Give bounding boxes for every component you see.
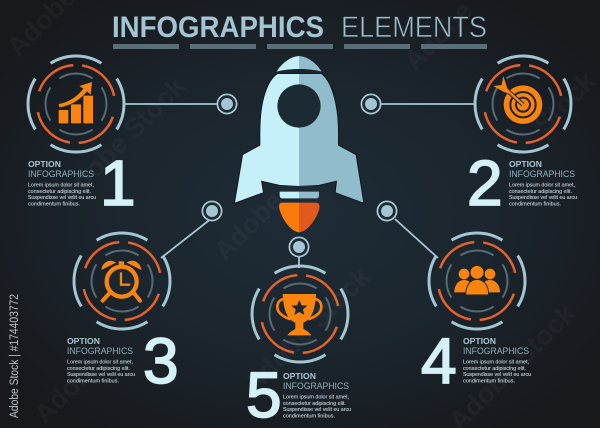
rocket nose — [277, 56, 322, 72]
text block 3 — [67, 336, 135, 384]
text block 1: OPTION — [28, 159, 61, 169]
text block 2 — [509, 159, 577, 207]
title — [112, 11, 487, 44]
text: Stock — [528, 65, 600, 139]
text: Adobe Stock — [238, 261, 377, 399]
icon: target with arrow — [493, 76, 542, 124]
vertical stock credit: Adobe Stock | #174403772 — [9, 294, 21, 418]
title underline bars — [113, 44, 487, 49]
text block 5: condimentum finibus. — [283, 413, 335, 419]
connector lines — [125, 104, 474, 268]
title: ELEMENTS — [341, 11, 487, 44]
text block 4: OPTION — [463, 336, 496, 346]
text block 5: Lorem ipsum dolor sit amet, — [283, 394, 349, 400]
text: Adobe Stock — [53, 71, 192, 209]
text block 2: Lorem ipsum dolor sit amet, — [509, 182, 575, 188]
text: Adobe — [208, 186, 289, 266]
text block 2: consectetur adipiscing elit. — [509, 189, 572, 195]
text block 4: condimentum finibus. — [463, 378, 515, 384]
icon: trophy — [277, 294, 321, 335]
text block 3: Suspendisse vel velit eu arcu — [67, 372, 135, 378]
ring: option 5 — [250, 264, 350, 364]
rocket body right half — [299, 74, 363, 203]
ring: option 4 — [427, 231, 527, 331]
text block 3: consectetur adipiscing elit. — [67, 366, 130, 372]
text block 1: consectetur adipiscing elit. — [28, 189, 91, 195]
text: Adobe — [28, 349, 109, 428]
connector nodes — [202, 94, 397, 257]
text block 3: Lorem ipsum dolor sit amet, — [67, 360, 133, 366]
ring: option 1 — [26, 54, 126, 154]
icon: alarm clock — [101, 261, 141, 301]
text block 5: OPTION — [283, 371, 316, 381]
text block 3: INFOGRAPHICS — [67, 346, 133, 356]
text block 5 — [283, 371, 351, 419]
text block 5: Suspendisse vel velit eu arcu — [283, 407, 351, 413]
number 3: 3 — [143, 325, 179, 397]
text block 4: Lorem ipsum dolor sit amet, — [463, 360, 529, 366]
text block 1: Lorem ipsum dolor sit amet, — [28, 182, 94, 188]
rocket nozzle — [280, 192, 319, 198]
text block 3: OPTION — [67, 336, 100, 346]
number 4: 4 — [421, 325, 457, 397]
icon: growth chart — [59, 82, 93, 123]
text block 2: Suspendisse vel velit eu arcu — [509, 195, 577, 201]
rocket flame — [279, 203, 320, 232]
text block 4: INFOGRAPHICS — [463, 346, 529, 356]
text block 5: INFOGRAPHICS — [283, 381, 349, 391]
text block 4: consectetur adipiscing elit. — [463, 366, 526, 372]
number 2: 2 — [467, 147, 503, 219]
text block 3: condimentum finibus. — [67, 378, 119, 384]
text block 1: condimentum finibus. — [28, 201, 80, 207]
text block 1: Suspendisse vel velit eu arcu — [28, 195, 96, 201]
rocket outline — [235, 74, 363, 203]
icon: group of people — [454, 265, 500, 295]
ring: option 3 — [72, 231, 172, 331]
text block 4: Suspendisse vel velit eu arcu — [463, 372, 531, 378]
number 1: 1 — [100, 147, 136, 219]
ring: option 2 — [473, 54, 573, 154]
text block 2: INFOGRAPHICS — [509, 169, 575, 179]
text block 1 — [28, 159, 96, 207]
rocket body left half — [235, 74, 299, 203]
text block 2: condimentum finibus. — [509, 201, 561, 207]
text block 4 — [463, 336, 531, 384]
rocket — [235, 56, 363, 232]
text block 2: OPTION — [509, 159, 542, 169]
title: INFOGRAPHICS — [112, 11, 324, 44]
rocket window — [277, 84, 321, 128]
text block 1: INFOGRAPHICS — [28, 169, 94, 179]
text block 5: consectetur adipiscing elit. — [283, 401, 346, 407]
